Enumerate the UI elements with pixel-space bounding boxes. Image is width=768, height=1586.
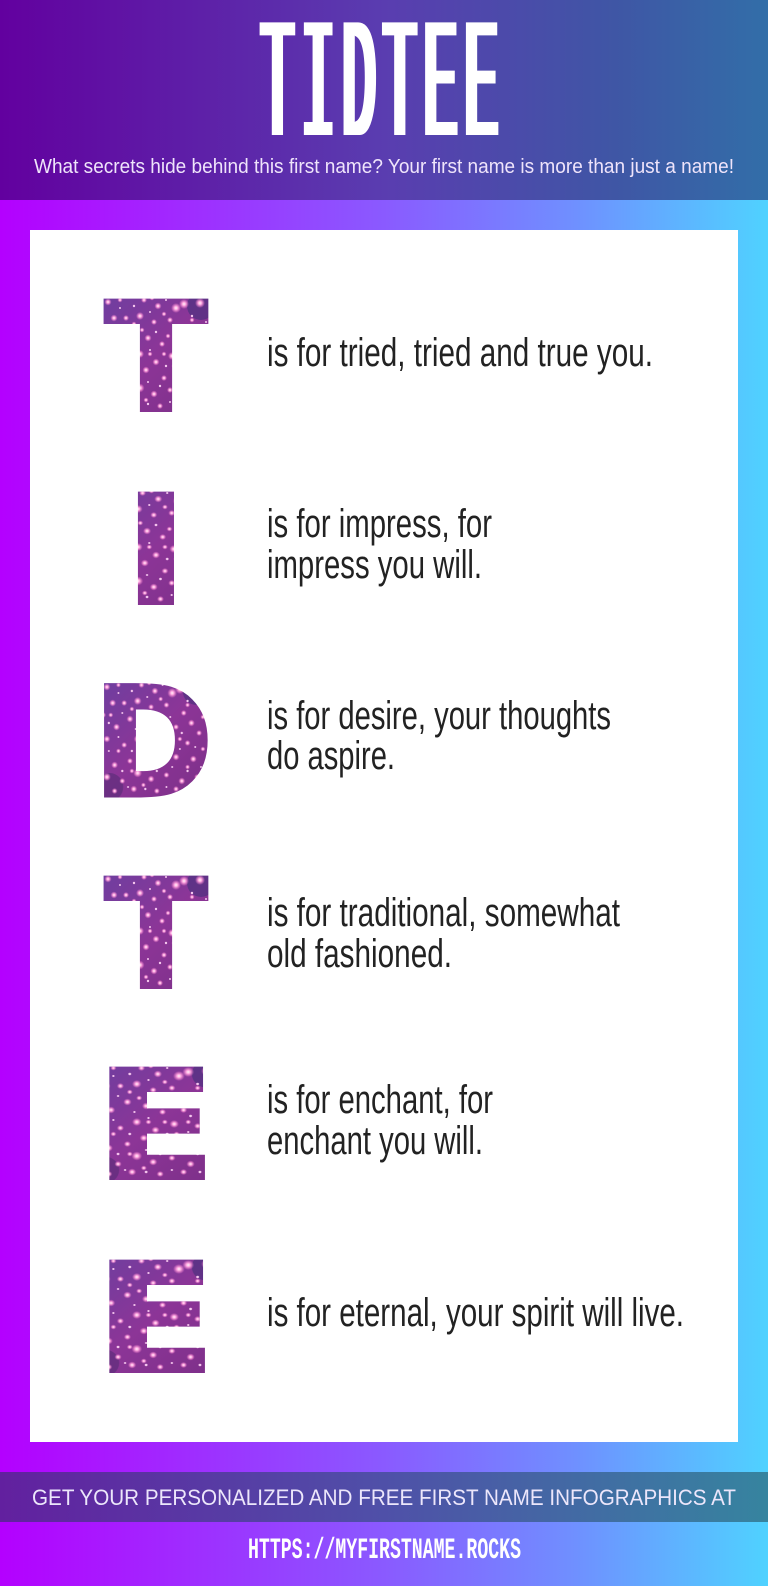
text: desire: is for desire, your thoughts <box>267 694 611 738</box>
galaxy letter I: I <box>125 464 187 639</box>
footer band <box>0 1472 768 1522</box>
text: impress <box>267 502 492 587</box>
row D: desire <box>93 656 611 831</box>
galaxy letter E: E <box>96 1232 215 1407</box>
text: desire <box>267 694 611 778</box>
galaxy letter D: D <box>93 656 213 831</box>
galaxy letter T: T <box>105 272 207 446</box>
text: impress: is for impress, for <box>267 502 492 546</box>
panel: acrostic card <box>30 230 738 1442</box>
text: enchant: enchant you will. <box>267 1119 483 1163</box>
galaxy letter E: E <box>96 1039 215 1214</box>
subtitle: What secrets hide behind this first name? Your first name is more than just a name! <box>34 156 734 178</box>
row T: traditional <box>105 849 620 1023</box>
text: desire: do aspire. <box>267 734 395 778</box>
text: enchant <box>267 1078 493 1163</box>
text: traditional: old fashioned. <box>267 932 452 976</box>
row E: eternal <box>96 1232 684 1407</box>
header band <box>0 0 768 200</box>
footer url: HTTPS://MYFIRSTNAME.ROCKS <box>248 1534 521 1568</box>
row T: tried <box>105 272 653 446</box>
text: impress: impress you will. <box>267 543 482 587</box>
row E: enchant <box>96 1039 493 1214</box>
text: enchant: is for enchant, for <box>267 1078 493 1122</box>
text: traditional: is for traditional, somewhat <box>267 891 620 935</box>
galaxy letter T: T <box>105 849 207 1023</box>
text: traditional <box>267 891 620 976</box>
row I: impress <box>125 464 492 639</box>
